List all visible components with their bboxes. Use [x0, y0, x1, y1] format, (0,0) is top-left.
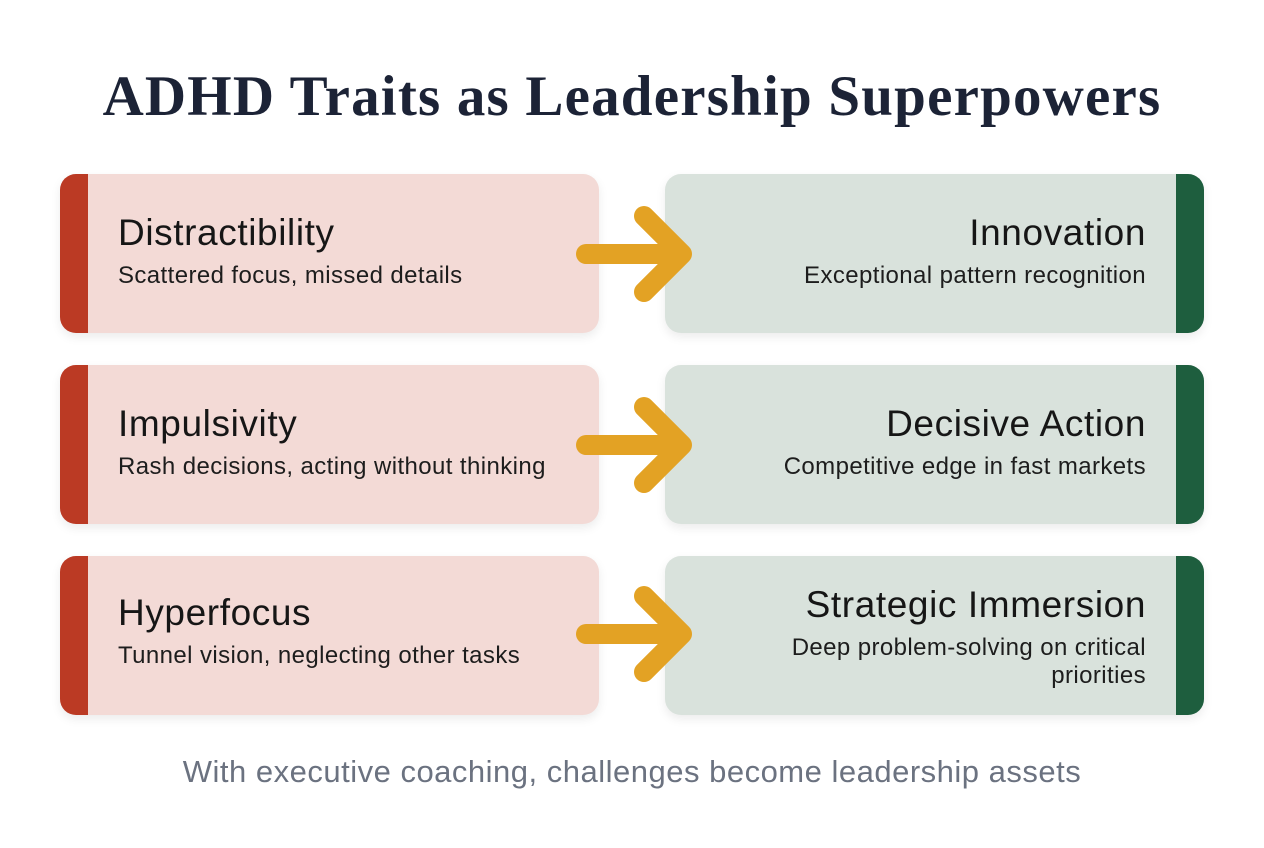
- panel: innovation: Innovation: [969, 212, 1146, 253]
- panel: decisive action: [665, 365, 1204, 524]
- title: ADHD Traits as Leadership Superpowers: [103, 65, 1161, 128]
- panel: hyperfocus: Hyperfocus: [118, 592, 311, 633]
- panel: strategic immersion: [665, 556, 1204, 715]
- arrow 1: [576, 206, 692, 302]
- arrow 2: [576, 397, 692, 493]
- panel: impulsivity: Impulsivity: [118, 403, 297, 444]
- panel: strategic immersion: priorities: [1051, 662, 1146, 689]
- panel: hyperfocus: Tunnel vision, neglecting other tasks: [118, 642, 520, 669]
- panel: strategic immersion: Strategic Immersion: [806, 584, 1146, 625]
- panel: decisive action: Decisive Action: [886, 403, 1146, 444]
- panel: hyperfocus: [60, 556, 599, 715]
- panel: distractibility: [60, 174, 599, 333]
- panel: innovation: [665, 174, 1204, 333]
- panel: strategic immersion: Deep problem-solving on critical: [792, 634, 1146, 661]
- arrow 3: [576, 586, 692, 682]
- panel: distractibility: Distractibility: [118, 212, 335, 253]
- panel: decisive action: Competitive edge in fast markets: [784, 453, 1146, 480]
- panel: impulsivity: [60, 365, 599, 524]
- panel: impulsivity: Rash decisions, acting without thinking: [118, 453, 546, 480]
- panel: innovation: Exceptional pattern recognition: [804, 262, 1146, 289]
- panel: distractibility: Scattered focus, missed details: [118, 262, 463, 289]
- footer: With executive coaching, challenges become leadership assets: [183, 754, 1081, 789]
